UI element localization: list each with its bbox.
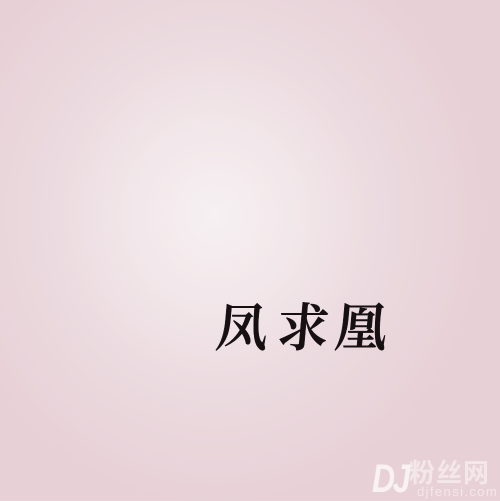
watermark logo: 粉丝网 <box>409 458 490 488</box>
title: 凰 <box>333 301 390 358</box>
watermark logo <box>372 457 498 501</box>
watermark logo: DJ <box>372 457 408 501</box>
title: 求 <box>275 301 332 358</box>
title: 凤 <box>214 301 271 358</box>
title <box>214 301 390 358</box>
watermark logo: djfensi.com <box>417 484 498 499</box>
